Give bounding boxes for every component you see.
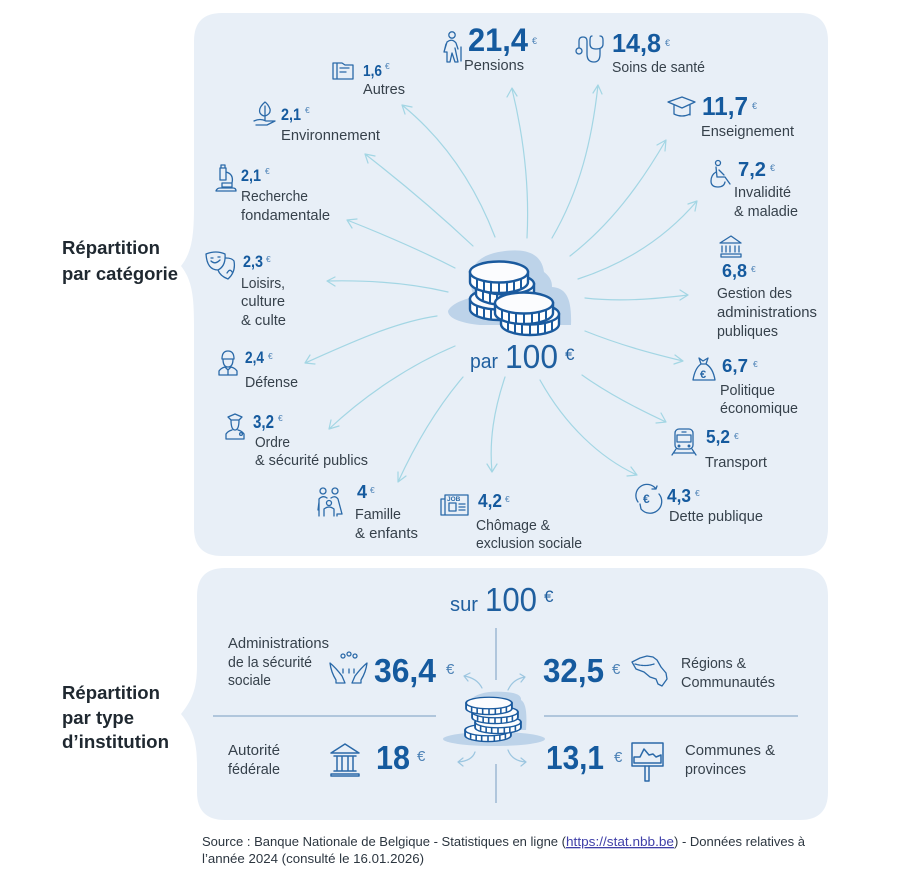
label: politique économique: Politique xyxy=(720,382,775,399)
item: autres: € xyxy=(385,61,390,71)
panel: répartition par catégorie xyxy=(181,13,828,556)
heading: répartition par catégorie: Répartition xyxy=(62,238,160,258)
icon: job newspaper xyxy=(441,495,468,515)
icon: theatre masks xyxy=(206,252,234,279)
label: régions et communautés: Régions & xyxy=(681,655,746,672)
quadrant: communes et provinces: € xyxy=(614,749,623,766)
value: 2,3: 2,3 xyxy=(243,252,263,271)
label: autorité fédérale xyxy=(228,742,280,778)
label: sur 100 € xyxy=(450,581,554,618)
value: 2,1: 2,1 xyxy=(241,166,261,185)
heading: répartition par catégorie xyxy=(62,238,178,284)
item: soins de santé: € xyxy=(665,38,670,48)
icon: soldier xyxy=(219,351,237,375)
quadrant: administrations de la sécurité sociale xyxy=(228,635,455,689)
heading: répartition par catégorie: par catégorie xyxy=(62,264,178,284)
item: dette publique: € xyxy=(643,492,650,506)
item: recherche fondamentale: € xyxy=(265,166,270,176)
panel: répartition par type d'institution xyxy=(181,568,828,820)
item: politique économique: € xyxy=(753,359,758,369)
item: chômage et exclusion sociale xyxy=(441,491,582,552)
label: loisirs, culture et culte xyxy=(241,275,286,329)
value: 11,7: 11,7 xyxy=(702,91,748,121)
label: famille et enfants: Famille xyxy=(355,506,401,523)
label: gestion des administrations publiques: publiques xyxy=(717,323,778,340)
label: gestion des administrations publiques xyxy=(717,285,817,340)
icon: family xyxy=(318,488,342,516)
value: 4,3: 4,3 xyxy=(667,486,691,506)
item: autres xyxy=(333,61,405,98)
icon: police officer xyxy=(226,414,244,439)
label: enseignement: Enseignement xyxy=(701,123,795,140)
label: loisirs, culture et culte: Loisirs, xyxy=(241,275,285,292)
label: communes et provinces xyxy=(685,742,775,778)
label: autorité fédérale: Autorité xyxy=(228,742,280,759)
source note: Source : Banque Nationale de Belgique - Statistiques en ligne ( xyxy=(202,834,567,849)
item: soins de santé xyxy=(576,28,705,76)
icon: debt cycle xyxy=(636,484,662,513)
label: famille et enfants: & enfants xyxy=(355,525,418,542)
label: défense: Défense xyxy=(245,374,298,391)
value: 5,2: 5,2 xyxy=(706,427,730,447)
small arrows around coins xyxy=(458,673,526,766)
item: défense: € xyxy=(268,351,273,361)
value: 14,8: 14,8 xyxy=(612,28,661,58)
icon: town sign xyxy=(632,743,663,781)
quadrant: régions et communautés: € xyxy=(612,661,621,678)
item: dette publique xyxy=(636,484,763,525)
label: chômage et exclusion sociale: Chômage & xyxy=(476,517,550,534)
value: 7,2: 7,2 xyxy=(738,159,766,181)
value: 2,4: 2,4 xyxy=(245,348,264,367)
label: invalidité et maladie: Invalidité xyxy=(734,184,791,201)
label: administrations de la sécurité sociale: Administrations xyxy=(228,635,329,652)
label: recherche fondamentale: fondamentale xyxy=(241,207,330,224)
item: loisirs, culture et culte xyxy=(206,252,286,329)
source note: ) - Données relatives à xyxy=(674,834,806,849)
item: transport: € xyxy=(734,431,739,441)
quadrant: communes et provinces xyxy=(546,739,775,781)
label: transport: Transport xyxy=(705,454,768,471)
heading: répartition par type d'institution: Répartition xyxy=(62,683,160,703)
label: gestion des administrations publiques: administrations xyxy=(717,304,817,321)
heading: répartition par type d'institution: par type xyxy=(62,708,134,728)
source note: https://stat.nbb.be xyxy=(566,834,674,849)
icon: elderly person xyxy=(444,32,461,62)
item: politique économique xyxy=(693,356,798,417)
icon: folder xyxy=(333,63,353,79)
item: dette publique: € xyxy=(695,488,700,498)
quadrant: autorité fédérale: € xyxy=(417,748,426,765)
value: 4: 4 xyxy=(357,482,367,502)
item: invalidité et maladie xyxy=(711,159,798,220)
label: invalidité et maladie: & maladie xyxy=(734,203,798,220)
quadrant: régions et communautés xyxy=(543,652,775,691)
label: régions et communautés: Communautés xyxy=(681,674,775,691)
central label: par 100 €: 100 xyxy=(505,338,558,375)
value: 13,1: 13,1 xyxy=(546,739,604,776)
item: famille et enfants xyxy=(318,482,418,542)
label: famille et enfants xyxy=(355,506,418,542)
label: chômage et exclusion sociale: exclusion sociale xyxy=(476,535,582,552)
value: 4,2: 4,2 xyxy=(478,491,502,511)
value: 21,4: 21,4 xyxy=(468,22,528,58)
label: administrations de la sécurité sociale xyxy=(228,635,329,689)
item: ordre et sécurité publics: € xyxy=(278,413,283,423)
value: 6,8: 6,8 xyxy=(722,261,747,281)
item: famille et enfants: € xyxy=(370,485,375,495)
label: autorité fédérale: fédérale xyxy=(228,761,280,778)
item: recherche fondamentale xyxy=(216,165,330,224)
item: transport xyxy=(672,427,768,471)
label: administrations de la sécurité sociale: de la sécurité xyxy=(228,654,312,671)
icon: hand with leaf xyxy=(254,102,275,125)
central label: par 100 €: par xyxy=(470,351,498,373)
item: défense xyxy=(219,348,298,391)
label: ordre et sécurité publics: & sécurité publics xyxy=(255,452,368,469)
value: 1,6: 1,6 xyxy=(363,63,382,80)
label: communes et provinces: provinces xyxy=(685,761,746,778)
value: 36,4: 36,4 xyxy=(374,652,437,689)
label: loisirs, culture et culte: culture xyxy=(241,293,285,310)
label: sur 100 €: € xyxy=(544,587,554,606)
label: ordre et sécurité publics xyxy=(255,434,368,469)
value: 3,2: 3,2 xyxy=(253,412,274,432)
value: 2,1: 2,1 xyxy=(281,105,301,124)
label: environnement: Environnement xyxy=(281,127,381,144)
label: administrations de la sécurité sociale: sociale xyxy=(228,672,271,689)
value: 32,5: 32,5 xyxy=(543,652,604,689)
item: environnement: € xyxy=(305,105,310,115)
heading: répartition par type d'institution xyxy=(62,683,169,752)
label: dette publique: Dette publique xyxy=(669,508,763,525)
quadrant: administrations de la sécurité sociale: € xyxy=(446,661,455,678)
icon: hands holding people xyxy=(330,652,367,683)
label: invalidité et maladie xyxy=(734,184,798,220)
icon: federal building xyxy=(331,744,359,776)
source note xyxy=(202,834,806,866)
item: invalidité et maladie: € xyxy=(770,163,775,173)
icon: train xyxy=(672,429,696,455)
label: chômage et exclusion sociale xyxy=(476,517,582,552)
item: politique économique: € xyxy=(700,369,706,381)
label: régions et communautés xyxy=(681,655,775,691)
label: loisirs, culture et culte: & culte xyxy=(241,312,286,329)
item: loisirs, culture et culte: € xyxy=(266,254,271,264)
heading: répartition par type d'institution: d’institution xyxy=(62,732,169,752)
label: ordre et sécurité publics: Ordre xyxy=(255,434,290,451)
icon: money bag xyxy=(693,358,715,380)
coin stack: central xyxy=(448,250,571,335)
item: pensions xyxy=(444,22,537,74)
label: sur 100 €: sur xyxy=(450,594,478,616)
label: recherche fondamentale xyxy=(241,188,330,224)
icon: map of Belgium xyxy=(632,656,667,686)
item: gestion des administrations publiques: € xyxy=(751,264,756,274)
coin stack: small xyxy=(443,692,545,746)
label: politique économique xyxy=(720,382,798,417)
arrows: radiating from coins xyxy=(305,85,697,482)
icon: public building xyxy=(720,236,741,257)
icon: stethoscope xyxy=(576,36,603,62)
icon: microscope xyxy=(216,165,236,191)
label: autres: Autres xyxy=(363,81,405,98)
item: chômage et exclusion sociale: JOB xyxy=(447,496,461,503)
item: gestion des administrations publiques xyxy=(717,236,817,340)
value: 6,7: 6,7 xyxy=(722,356,748,376)
quadrant dividers xyxy=(213,628,798,803)
item: chômage et exclusion sociale: € xyxy=(505,494,510,504)
label: soins de santé: Soins de santé xyxy=(612,59,705,76)
label: pensions: Pensions xyxy=(464,57,524,74)
central label: par 100 €: € xyxy=(565,345,575,364)
item: pensions: € xyxy=(532,36,537,46)
source note: l’année 2024 (consulté le 16.01.2026) xyxy=(202,851,424,866)
icon: graduation cap xyxy=(668,97,695,116)
label: sur 100 €: 100 xyxy=(485,581,537,618)
label: communes et provinces: Communes & xyxy=(685,742,775,759)
item: enseignement xyxy=(668,91,795,140)
label: politique économique: économique xyxy=(720,400,798,417)
icon: wheelchair xyxy=(711,160,730,187)
quadrant: autorité fédérale xyxy=(228,739,426,778)
item: enseignement: € xyxy=(752,101,757,111)
value: 18: 18 xyxy=(376,739,410,776)
item: environnement xyxy=(254,102,381,144)
label: recherche fondamentale: Recherche xyxy=(241,188,308,205)
label: gestion des administrations publiques: Gestion des xyxy=(717,285,792,302)
item: ordre et sécurité publics xyxy=(226,412,368,469)
central label: par 100 € xyxy=(470,338,575,375)
